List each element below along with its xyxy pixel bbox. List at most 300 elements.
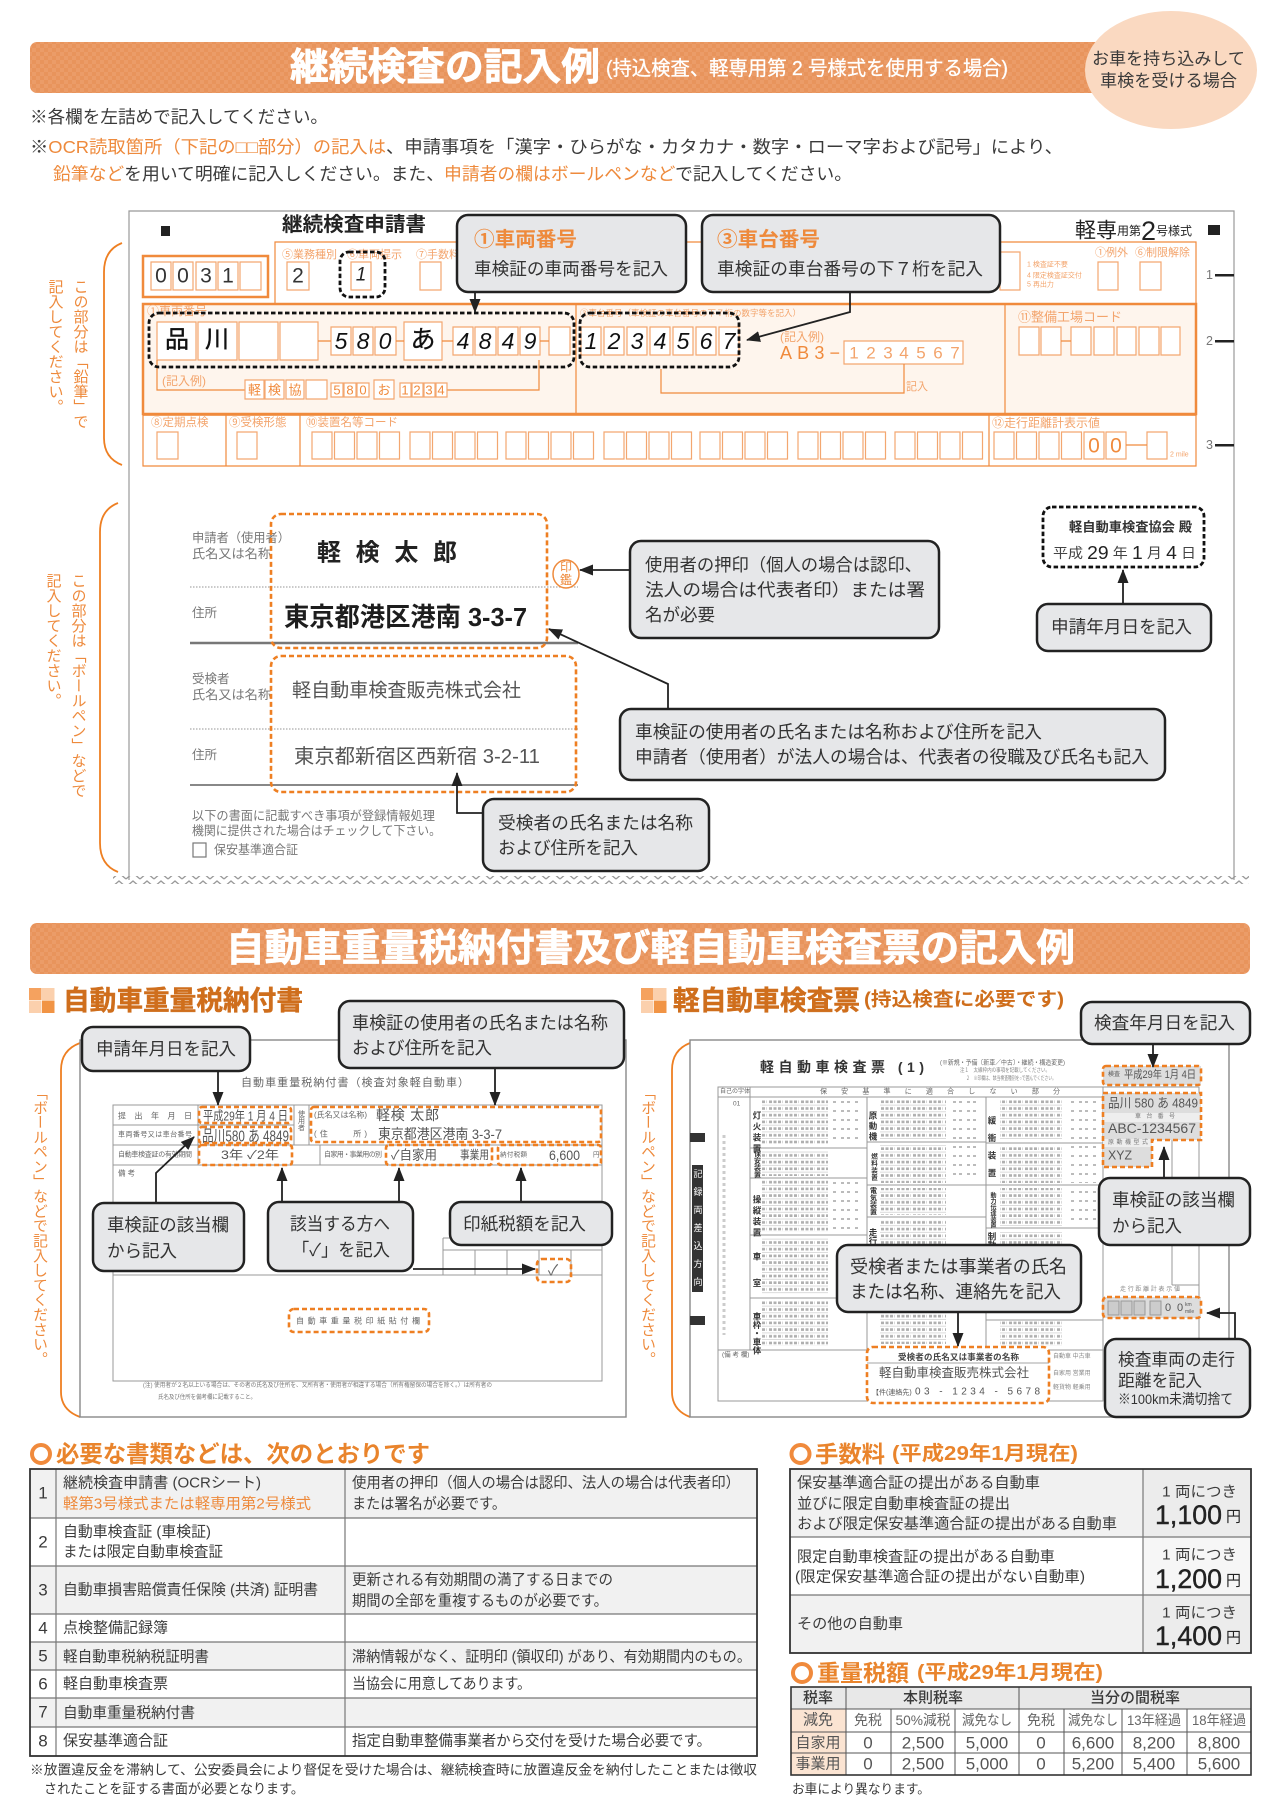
form notes: ２ ※印欄は、該当検査種別を○で囲んでください。 <box>966 1074 1056 1082</box>
table headers: 当分の間税率 <box>1090 1690 1180 1706</box>
section labels: 車枠・車体 <box>752 1311 762 1355</box>
arrow <box>1152 1044 1154 1067</box>
form section: bottom row: ⑨受検形態 <box>229 415 287 429</box>
odometer cell <box>1103 1285 1201 1318</box>
section heading: 軽自動車検査票 <box>641 986 1064 1016</box>
instructions text: ※OCR読取箇所（下記の□□部分）の記入は 、申請事項を「漢字・ひらがな・カタカナ・数字・ローマ字および記号」により、 <box>30 137 1063 157</box>
panel: 自動車重量税納付書 form: 提出年月日 <box>118 1110 192 1120</box>
table values: 8,800 <box>1198 1734 1240 1752</box>
document names: 継続検査申請書 (OCRシート) <box>63 1474 261 1492</box>
fee conditions: 限定自動車検査証の提出がある自動車 <box>797 1548 1055 1566</box>
date block: 平成 29 年 1 月 4 日 <box>1053 543 1196 563</box>
callout: 使用者の氏名 (納付書): および住所を記入 <box>352 1038 492 1058</box>
odometer cell: 00 <box>1165 1302 1183 1314</box>
note: お車により異なります: お車により異なります。 <box>792 1782 930 1796</box>
section labels: 灯火装置 <box>752 1110 762 1155</box>
table headers: 自家用 <box>795 1734 841 1752</box>
fee conditions: その他の自動車 <box>797 1616 903 1632</box>
form section: bottom row <box>143 414 1196 466</box>
callout: 押印: 法人の場合は代表者印）または署 <box>645 580 925 600</box>
form number label: 軽専用第2号様式 <box>1075 216 1192 246</box>
panel: 自動車重量税納付書 form: 車両番号又は車台番号 <box>118 1130 192 1138</box>
dotted marker: 車両番号 <box>149 313 574 367</box>
row numbers: 6 <box>38 1674 48 1694</box>
panel: 自動車重量税納付書 form: 軽検 太郎 <box>376 1107 439 1123</box>
form section: middle row: 軽検協580お1234 <box>248 382 445 398</box>
section labels: 動力伝達装置 <box>989 1191 996 1229</box>
recipient block <box>867 1347 1091 1403</box>
date: 平成29年 1 月 4 日 <box>203 1108 288 1124</box>
panel: 継続検査申請書 form: 2 <box>1206 334 1213 348</box>
table headers: 税率 <box>803 1690 833 1706</box>
vehicle cell: ABC-1234567 <box>1108 1120 1196 1136</box>
user name and address: (氏名又は名称) <box>314 1110 367 1120</box>
section heading: 自動車重量税納付書: 自動車重量税納付書 <box>63 986 303 1016</box>
panel: 自動車重量税納付書 form: 備 考 <box>118 1168 135 1178</box>
badge: お車を持ち込みして車検を受ける場合 <box>1085 11 1257 129</box>
form footnote: (注) 使用者が２名以上いる場合は、その者の氏名及び住所を、又所有者・使用者が相違する場合（所有権留保の場合を除く。）は所有者の <box>143 1381 492 1389</box>
form section: middle row: 記入 <box>906 380 928 393</box>
recipient block: 軽自動車検査販売株式会社 <box>879 1365 1029 1380</box>
callout: 受検者または事業者: または名称、連絡先を記入 <box>850 1282 1061 1302</box>
fee amounts: 1,200 <box>1155 1564 1222 1594</box>
callout: 押印: 使用者の押印（個人の場合は認印、 <box>645 555 922 575</box>
panel: 自動車重量税納付書 form: 自動車重量税納付書（検査対象軽自動車） <box>241 1075 469 1089</box>
callout: 申請年月日 (納付書): 申請年月日を記入 <box>96 1039 236 1059</box>
document names <box>63 1474 318 1750</box>
vertical note: 鉛筆で記入 <box>46 279 88 429</box>
header row <box>720 1086 1060 1358</box>
header row: (備 考 欄) <box>722 1350 749 1358</box>
arrow <box>1207 1313 1235 1339</box>
callout: 走行距離: 検査車両の走行 <box>1118 1350 1235 1370</box>
form section: middle row: 4849 <box>457 328 537 354</box>
form section: top row: ⑤業務種別 <box>282 247 337 261</box>
odometer cell: 走行距離計表示値 <box>1120 1285 1180 1293</box>
vertical note: 鉛筆で記入: 記入してください。 <box>46 279 64 414</box>
table headers <box>795 1690 1246 1772</box>
instructions text: 鉛筆などを用いて明確に記入しください。また、 申請者の欄はボールペンなどで記入してください。 <box>53 164 852 184</box>
recipient block: 自動車 中古車 <box>1053 1352 1091 1360</box>
form section: middle row: ①車両番号 <box>147 304 207 318</box>
callout: 該当する方へ: 該当する方へ <box>290 1214 390 1234</box>
form footnote: 氏名及び住所を備考欄に記載すること。 <box>158 1393 256 1401</box>
arrow: to seal <box>580 569 630 571</box>
bracket: ボールペン section <box>100 503 118 872</box>
applicant name: 軽検太郎 <box>317 540 457 566</box>
arrow <box>1163 1147 1165 1178</box>
section labels: 燃料装置 <box>870 1152 878 1182</box>
callout: ① 車両番号 <box>457 215 686 292</box>
fee amounts: 円 <box>1226 1508 1241 1526</box>
table headers: 事業用 <box>795 1756 841 1772</box>
orange dashed highlights <box>199 1107 601 1332</box>
callout: 押印: 名が必要 <box>645 605 715 625</box>
inspection company: 軽自動車検査販売株式会社 <box>292 680 521 702</box>
callout: 走行距離: 距離を記入 <box>1118 1372 1202 1390</box>
fee amounts: 1,100 <box>1155 1500 1222 1530</box>
vehicle cell: 車台番号 <box>1135 1112 1175 1120</box>
callout: ① 車両番号: ①車両番号 <box>474 228 577 251</box>
fee conditions: (限定保安基準適合証の提出がない自動車) <box>795 1568 1085 1586</box>
vertical note: ボールペンで記入: 記入してください。 <box>44 573 62 708</box>
document names: 軽第3号様式または軽専用第2号様式 <box>63 1496 311 1512</box>
panel: 自動車重量税納付書 form: (住 所) <box>314 1128 367 1138</box>
callout: 受検者の氏名 <box>483 799 709 871</box>
row numbers <box>38 1484 48 1750</box>
document notes: 使用者の押印（個人の場合は認印、法人の場合は代表者印） <box>352 1474 740 1492</box>
table values: 0 <box>1036 1754 1046 1774</box>
callout: 使用者の氏名 (納付書) <box>339 1001 624 1068</box>
panel: 自動車重量税納付書 form: 事業用 <box>460 1148 489 1162</box>
form section: bottom row: ⑩装置名等コード <box>306 415 398 429</box>
document notes: または署名が必要です。 <box>352 1496 506 1512</box>
form section: bottom row: ⑫走行距離計表示値 <box>992 415 1100 430</box>
fee conditions <box>795 1474 1117 1632</box>
form table grid <box>113 1105 602 1381</box>
applicant fields: 受検者 <box>192 672 230 686</box>
vertical note: ボールペンで記入 <box>44 573 86 798</box>
applicant fields: 住所 <box>192 748 218 762</box>
form section: middle row: 580 <box>335 328 392 354</box>
date block: 軽自動車検査協会 殿 <box>1069 520 1192 534</box>
row numbers: 8 <box>38 1732 48 1750</box>
form section: middle row: 1234567 <box>585 328 737 354</box>
form section: top row: 2 <box>292 264 304 288</box>
section labels: 電気装置 <box>870 1187 877 1216</box>
panel: 自動車重量税納付書 form: 使用者 <box>298 1109 305 1132</box>
callout: 使用者の氏名: 申請者（使用者）が法人の場合は、代表者の役職及び氏名も記入 <box>635 747 1149 767</box>
panel: 自動車重量税納付書 form: ✓自家用 <box>391 1148 437 1162</box>
check mark: ✓ <box>548 1262 559 1280</box>
table: 必要な書類 <box>30 1469 757 1756</box>
panel: 継続検査申請書 form: 1 <box>1206 268 1213 282</box>
table values: 5,400 <box>1133 1754 1175 1774</box>
panel: 継続検査申請書 form: 3 <box>1206 438 1213 452</box>
document notes: 滞納情報がなく、証明印 (領収印) があり、有効期間内のもの。 <box>352 1648 751 1666</box>
banner title: 継続検査の記入例 <box>290 47 600 89</box>
callout: 車検証の該当欄 (納付書) <box>93 1203 244 1271</box>
row numbers: 3 <box>38 1580 48 1600</box>
callout: 走行距離 <box>1105 1339 1250 1417</box>
callout: 車検証の該当欄 (納付書): から記入 <box>107 1241 177 1261</box>
vehicle cell: 品川 580 あ 4849 <box>1108 1096 1198 1110</box>
direction marks <box>690 1133 705 1325</box>
fee conditions: および限定保安基準適合証の提出がある自動車 <box>797 1516 1117 1532</box>
callout: 検査年月日: 検査年月日を記入 <box>1094 1013 1235 1033</box>
form section: middle row: 1234567 <box>849 344 960 362</box>
inspection table grid <box>718 1087 1199 1401</box>
form footnote <box>143 1381 492 1401</box>
private or business: 自家用・事業用の別 <box>324 1150 382 1158</box>
row numbers: 5 <box>38 1646 48 1666</box>
dashed box: applicant <box>271 514 547 648</box>
recipient block: 受検者の氏名又は事業者の名称 <box>898 1352 1019 1362</box>
arrow <box>957 1312 959 1346</box>
bracket: 納付書 <box>61 1043 80 1417</box>
document names: または限定自動車検査証 <box>63 1544 223 1560</box>
arrow: to inspection recipient <box>457 773 483 813</box>
form section: middle row: あ <box>410 326 436 354</box>
arrow: to applicant <box>549 629 668 709</box>
arrow <box>217 1071 219 1105</box>
callout: 申請年月日 <box>1037 604 1211 651</box>
inspection items (micro rows) <box>724 1100 1096 1346</box>
fee amounts: 円 <box>1226 1572 1241 1590</box>
section labels: 操縦装置 <box>752 1194 762 1239</box>
section labels: 車室 <box>752 1251 762 1305</box>
form section: bottom row: 2 mile <box>1170 452 1189 458</box>
section labels: 制動 <box>987 1231 997 1250</box>
section heading: 軽自動車検査票: 軽自動車検査票 <box>673 986 860 1016</box>
callout: 車検証の該当欄 (検査票): から記入 <box>1112 1216 1182 1236</box>
instructions text <box>30 107 1063 184</box>
plate number: 品川580 あ 4849 <box>202 1128 289 1146</box>
panel: 自動車重量税納付書 form: 円 <box>593 1150 600 1158</box>
vertical note: 鉛筆で記入: この部分は「鉛筆」で <box>72 279 88 429</box>
recipient block: 03 - 1234 - 5678 <box>915 1386 1040 1398</box>
vertical note: 納付書: 「ボールペン」などで記入してください。 <box>31 1085 47 1366</box>
form title: 軽自動車検査票 (1) <box>760 1059 924 1075</box>
form notes <box>940 1058 1065 1082</box>
registration marks <box>161 225 1234 446</box>
odometer cell: km <box>1185 1302 1192 1308</box>
applicant fields <box>190 507 1204 857</box>
arrow: to date <box>1122 570 1124 604</box>
form section: top row <box>143 242 1196 304</box>
table headers: 本則税率 <box>903 1690 963 1706</box>
form section: top row: ⑥制限解除 <box>1135 245 1190 259</box>
seal: 鑑 <box>560 572 572 587</box>
recipient block: 軽貨物 軽乗用 <box>1053 1383 1091 1391</box>
arrow: to 車台番号 <box>747 293 850 340</box>
table values: 5,200 <box>1072 1754 1114 1774</box>
heading: 手数料: 手数料 <box>815 1441 885 1467</box>
recipient block: 【件(連絡先) <box>872 1388 912 1396</box>
arrow <box>494 1068 496 1105</box>
row numbers: 2 <box>38 1532 48 1552</box>
callout: 申請年月日 (納付書) <box>82 1027 250 1071</box>
header row: 保安基準に適合しない部分 <box>820 1086 1060 1096</box>
date cell <box>1103 1066 1201 1085</box>
table headers: 免税 <box>1027 1712 1055 1728</box>
table values: 6,600 <box>1072 1734 1114 1752</box>
document notes: 期間の全部を重複するものが必要です。 <box>352 1592 608 1610</box>
callout: 該当する方へ <box>268 1202 413 1271</box>
banner: 重量税納付書及び検査票: 自動車重量税納付書及び軽自動車検査票の記入例 <box>226 928 1075 970</box>
table values: 2,500 <box>902 1734 944 1752</box>
form section: top row: 4 限定検査証交付 <box>1027 270 1082 280</box>
callout: ① 車両番号: 車検証の車両番号を記入 <box>474 259 668 279</box>
applicant fields: 氏名又は名称 <box>192 687 272 702</box>
applicant fields: 申請者（使用者） <box>192 530 290 545</box>
row numbers: 7 <box>38 1702 48 1722</box>
document notes: 当協会に用意してあります。 <box>352 1676 531 1692</box>
callout: 車検証の該当欄 (検査票): 車検証の該当欄 <box>1112 1190 1235 1210</box>
table values: 2,500 <box>902 1754 944 1774</box>
table headers: 減免なし <box>962 1712 1012 1728</box>
document names: 自動車損害賠償責任保険 (共済) 証明書 <box>63 1582 318 1598</box>
form section: middle row: (記入例) <box>780 330 824 344</box>
dashed box: inspection recipient <box>271 656 576 792</box>
applicant address: 東京都港区港南 3-3-7 <box>284 602 527 632</box>
table headers: 免税 <box>854 1712 882 1728</box>
arrow <box>520 1168 522 1202</box>
table headers: 50%減税 <box>896 1712 950 1728</box>
document names: 自動車重量税納付書 <box>63 1704 195 1722</box>
table values: 8,200 <box>1133 1734 1175 1752</box>
arrow: to 車両番号 <box>474 293 476 312</box>
panel: 自動車重量税納付書 form: 6,600 <box>549 1147 580 1163</box>
table headers: 減免なし <box>1068 1712 1118 1728</box>
document notes <box>352 1474 751 1750</box>
validity period: 3年 ✓2年 <box>221 1148 279 1162</box>
badge: お車を持ち込みして車検を受ける場合: 車検を受ける場合 <box>1100 72 1237 90</box>
row numbers: 4 <box>38 1618 48 1638</box>
document names: 軽自動車検査票 <box>63 1676 168 1692</box>
panel: 軽自動車検査票 form: 記録両差込方向 <box>692 1169 702 1295</box>
form section: top row: 0031 <box>155 264 234 288</box>
section labels <box>752 1110 997 1355</box>
date cell: 平成29年 1月 4日 <box>1124 1067 1196 1081</box>
date cell: 検査 <box>1108 1070 1120 1078</box>
table headers: 18年経過 <box>1192 1712 1246 1728</box>
arrows from 該当する方へ <box>282 1168 535 1269</box>
footnote: 放置違反金: されたことを証する書面が必要となります。 <box>44 1782 304 1796</box>
table values: 0 <box>863 1754 873 1774</box>
form notes: (※新規・予備〔新車／中古〕・継続・構造変更) <box>940 1058 1065 1066</box>
form section: middle row: (記入例) <box>162 374 206 388</box>
instructions text: ※各欄を左詰めで記入してください。 <box>30 107 328 127</box>
form section: middle row <box>143 304 1196 414</box>
header row: 01 <box>733 1100 741 1108</box>
callout: 使用者の氏名 <box>620 709 1165 780</box>
heading: 重量税額: (平成29年1月現在) <box>917 1660 1103 1684</box>
vertical note: 検査票: 「ボールペン」などで記入してください。 <box>639 1085 655 1366</box>
callout: 使用者の氏名 (納付書): 車検証の使用者の氏名または名称 <box>352 1013 608 1033</box>
heading: 重量税額: 重量税額 <box>817 1660 909 1686</box>
footnote: 放置違反金 <box>30 1762 758 1796</box>
table: 手数料 <box>790 1469 1251 1653</box>
vehicle cell: XYZ <box>1108 1148 1132 1162</box>
callout: ③ 車台番号 <box>702 215 1000 292</box>
vertical note: ボールペンで記入: この部分は「ボールペン」などで <box>70 573 86 798</box>
callout: 受検者または事業者 <box>837 1245 1081 1312</box>
heading: 必要な書類: 必要な書類などは、次のとおりです <box>56 1441 430 1467</box>
stamp field: 自動車重量税印紙貼付欄 <box>296 1316 420 1326</box>
date block <box>1043 507 1204 567</box>
document notes: 更新される有効期間の満了する日までの <box>352 1572 613 1588</box>
document names: 点検整備記録簿 <box>63 1620 168 1636</box>
table values: 0 <box>863 1734 873 1752</box>
callout: 印紙税額: 印紙税額を記入 <box>463 1214 586 1234</box>
heading: 手数料 <box>792 1441 1078 1467</box>
table values: 5,000 <box>966 1754 1008 1774</box>
document names: 軽自動車税納税証明書 <box>63 1648 209 1666</box>
banner: 継続検査の記入例 <box>30 42 1120 93</box>
banner subtitle: (持込検査、軽専用第 2 号様式を使用する場合) <box>606 57 1008 80</box>
bracket: 検査票 <box>672 1043 690 1417</box>
dashed marker: 車両提示 <box>340 252 385 297</box>
recipient block: 自家用 営業用 <box>1053 1369 1091 1377</box>
odometer cell: mile <box>1185 1309 1194 1315</box>
bracket: 鉛筆 section <box>104 243 122 465</box>
document names: 自動車検査証 (車検証) <box>63 1524 211 1540</box>
panel: 自動車重量税納付書 form: 自動車検査証の有効期間 <box>118 1150 192 1158</box>
section labels: 緩衝装置 <box>987 1115 997 1186</box>
section heading: 軽自動車検査票: (持込検査に必要です) <box>864 988 1064 1010</box>
row numbers: 1 <box>38 1484 48 1502</box>
table values <box>863 1734 1240 1774</box>
callout: 車検証の該当欄 (納付書): 車検証の該当欄 <box>107 1215 229 1235</box>
heading: 重量税額 <box>793 1660 1103 1686</box>
form section: top row: 1 <box>356 264 366 286</box>
form section: top row: ①例外 <box>1095 245 1128 259</box>
form section: top row: 5 再出力 <box>1027 280 1054 288</box>
form section: middle row: 品川 <box>165 326 229 354</box>
callout: ③ 車台番号: 車検証の車台番号の下７桁を記入 <box>717 259 983 279</box>
vehicle cell <box>1103 1093 1201 1167</box>
form section: top row: ⑥車両提示 <box>347 247 402 261</box>
fee amounts: 円 <box>1226 1630 1241 1646</box>
panel: 軽自動車検査票 form <box>690 1040 1229 1417</box>
small print and checkbox <box>192 808 441 857</box>
panel: 自動車重量税納付書 form <box>80 1040 626 1417</box>
seal <box>553 560 579 588</box>
document names: 保安基準適合証 <box>63 1732 168 1750</box>
form section: top row: 1 検査証不要 <box>1027 260 1068 268</box>
table values: 5,000 <box>966 1734 1008 1752</box>
callout: 受検者の氏名: および住所を記入 <box>498 838 638 858</box>
callout: 押印 <box>630 541 939 638</box>
header row: 自己の字体 <box>720 1087 750 1095</box>
applicant fields: 住所 <box>192 606 218 620</box>
badge: お車を持ち込みして車検を受ける場合: お車を持ち込みして <box>1092 50 1245 68</box>
form section: bottom row: 00 <box>1088 434 1122 458</box>
callout: 受検者または事業者: 受検者または事業者の氏名 <box>850 1257 1067 1277</box>
callout: ③ 車台番号: ③車台番号 <box>717 228 820 251</box>
dotted marker: 車台番号 <box>580 313 739 367</box>
seal: 印 <box>560 560 572 574</box>
fee conditions: 保安基準適合証の提出がある自動車 <box>797 1474 1040 1492</box>
callout: 走行距離: ※100km未満切捨て <box>1118 1391 1233 1407</box>
footnote: 放置違反金: ※放置違反金を滞納して、公安委員会により督促を受けた場合は、継続検査時に放置違反金を納付したことまたは徴収 <box>30 1762 758 1778</box>
table values: 0 <box>1036 1734 1046 1752</box>
table headers: 減免 <box>803 1712 833 1728</box>
document notes: 指定自動車整備事業者から交付を受けた場合必要です。 <box>352 1732 711 1750</box>
form section: top row: ⑦手数料 <box>416 247 460 261</box>
vehicle cell: 原動機型式 <box>1108 1138 1148 1146</box>
banner: 重量税納付書及び検査票 <box>30 923 1250 974</box>
callout: 印紙税額 <box>450 1202 612 1245</box>
section labels: 原動機 <box>868 1111 878 1142</box>
fee amounts: 1 両につき <box>1162 1484 1237 1500</box>
form section: bottom row: ⑧定期点検 <box>151 415 209 429</box>
callout: 車検証の該当欄 (検査票) <box>1099 1178 1250 1245</box>
form notes: 注１ 太線枠内の事項を記載してください。 <box>960 1066 1050 1074</box>
fee amounts: 1 両につき <box>1162 1604 1237 1622</box>
heading: 手数料: (平成29年1月現在) <box>892 1441 1078 1465</box>
fee conditions: 並びに限定自動車検査証の提出 <box>797 1496 1010 1512</box>
callout: 受検者の氏名: 受検者の氏名または名称 <box>498 813 693 833</box>
form section: middle row: ③車台番号（車検証の車台番号の下７桁の数字等を記入） <box>580 308 801 318</box>
tax amount: 納付税額 <box>500 1150 528 1158</box>
arrow <box>156 1137 194 1203</box>
table values: 5,600 <box>1198 1754 1240 1774</box>
section labels: 走行 <box>868 1228 878 1246</box>
form title: 継続検査申請書 <box>282 213 426 236</box>
fee amounts <box>1155 1484 1241 1651</box>
